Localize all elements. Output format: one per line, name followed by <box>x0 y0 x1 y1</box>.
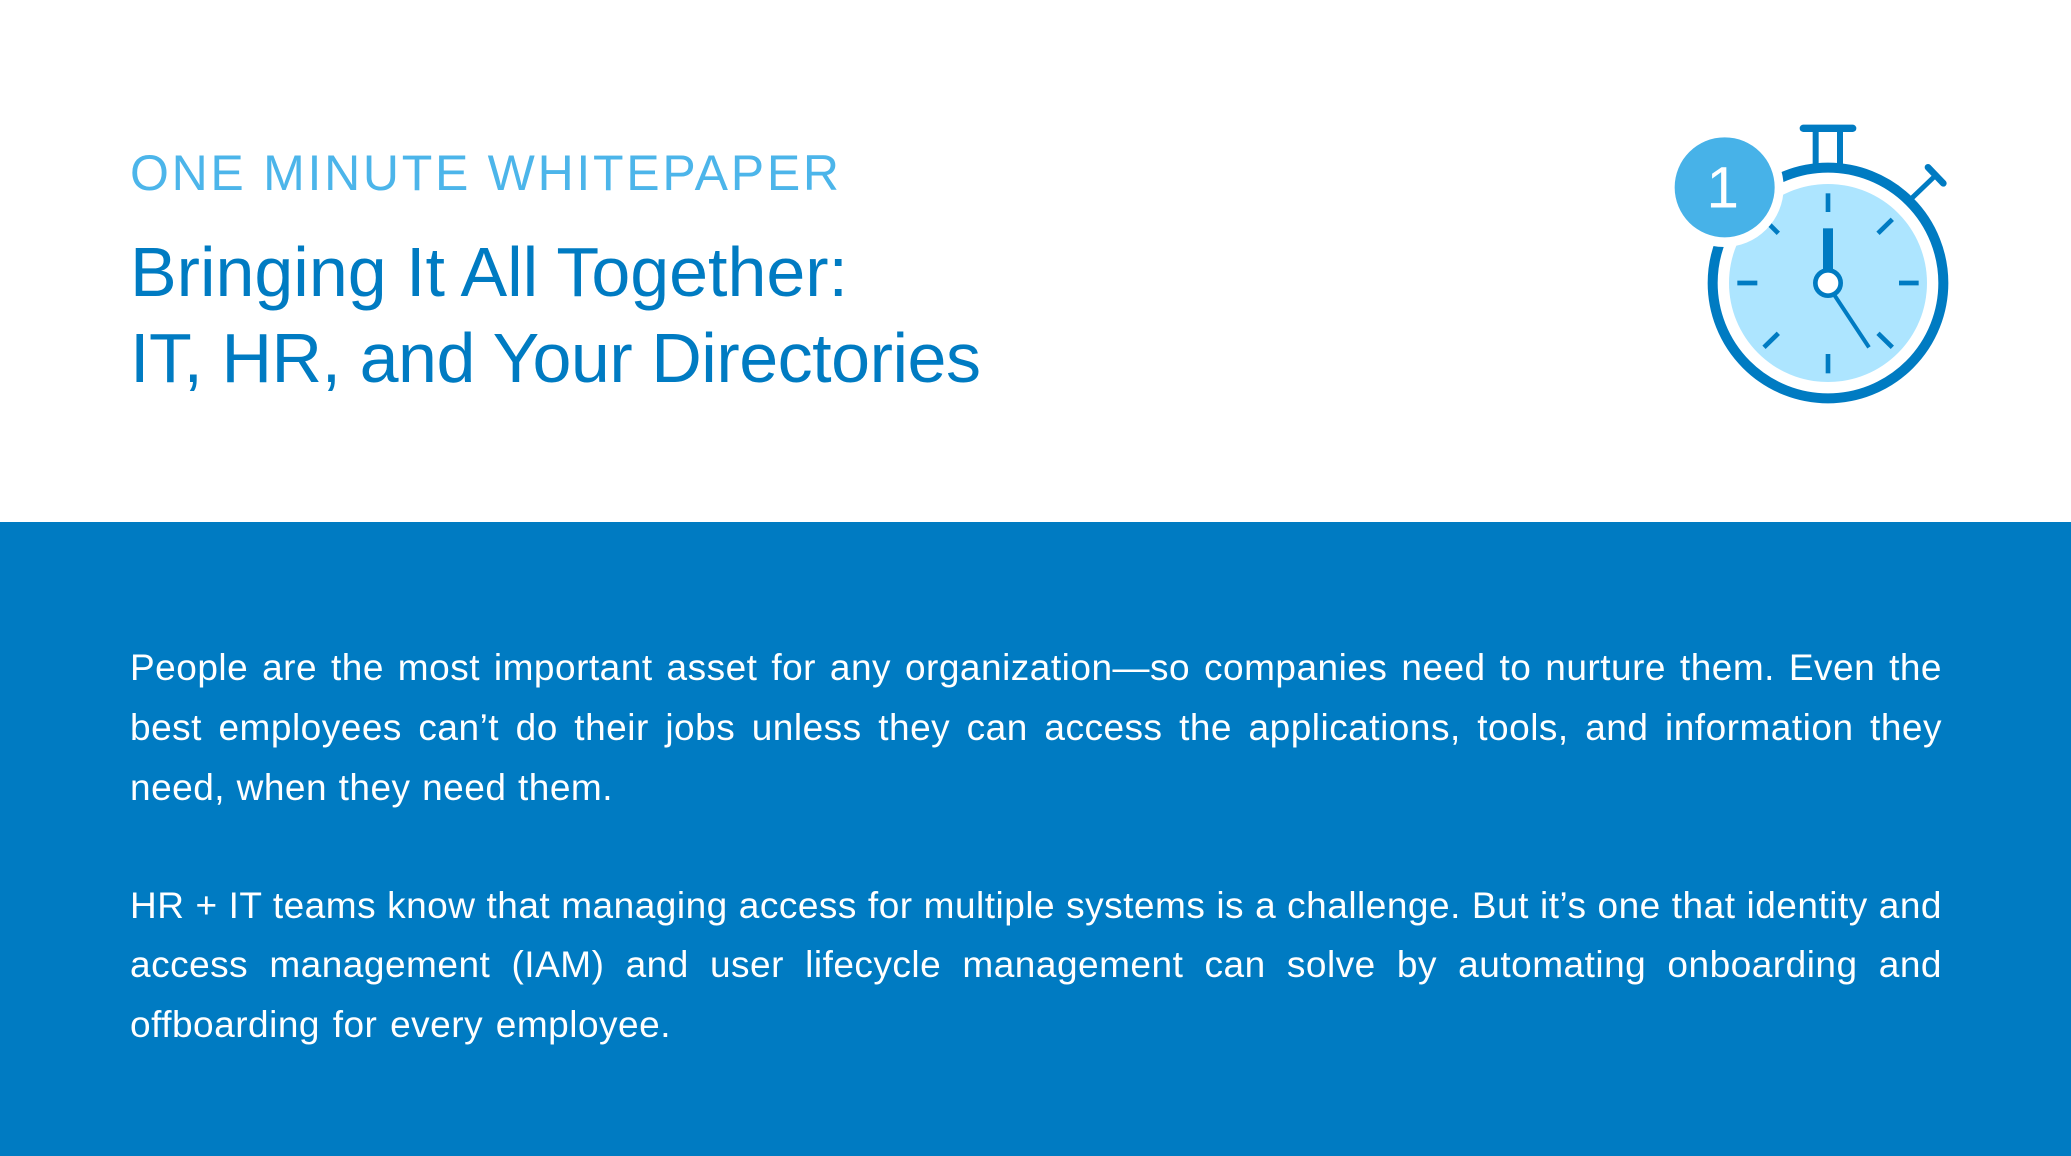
clock hands <box>1815 228 1869 347</box>
title: IT, HR, and Your Directories <box>130 319 981 397</box>
eyebrow: one minute whitepaper: ONE MINUTE WHITEPAPER <box>130 145 839 201</box>
text block: second paragraph: access management (IAM) and user lifecycle management can solve by automating onboarding and <box>130 944 1942 985</box>
badge halo <box>1664 128 1784 247</box>
stopwatch crown <box>1803 128 1943 198</box>
text block: first paragraph <box>130 647 1942 808</box>
number badge <box>1675 137 1775 237</box>
text block: second paragraph: HR + IT teams know that managing access for multiple systems is a challenge. But it’s one that identity and <box>130 885 1942 926</box>
text block: first paragraph: best employees can’t do their jobs unless they can access the applications, tools, and information they <box>130 707 1942 748</box>
text block: second paragraph: offboarding for every employee. <box>130 1004 671 1045</box>
title: Bringing It All Together: <box>130 233 848 311</box>
icon: stopwatch with number one badge <box>1674 124 1948 404</box>
text block: first paragraph: need, when they need them. <box>130 767 613 808</box>
title <box>130 233 981 397</box>
tick marks <box>1737 193 1919 373</box>
panel: blue body band <box>0 522 2071 1156</box>
number badge: 1 <box>1706 155 1739 220</box>
stopwatch face <box>1729 184 1927 382</box>
text block: first paragraph: People are the most important asset for any organization—so companies need to nurture them. Even the <box>130 647 1942 688</box>
header text <box>130 145 981 397</box>
